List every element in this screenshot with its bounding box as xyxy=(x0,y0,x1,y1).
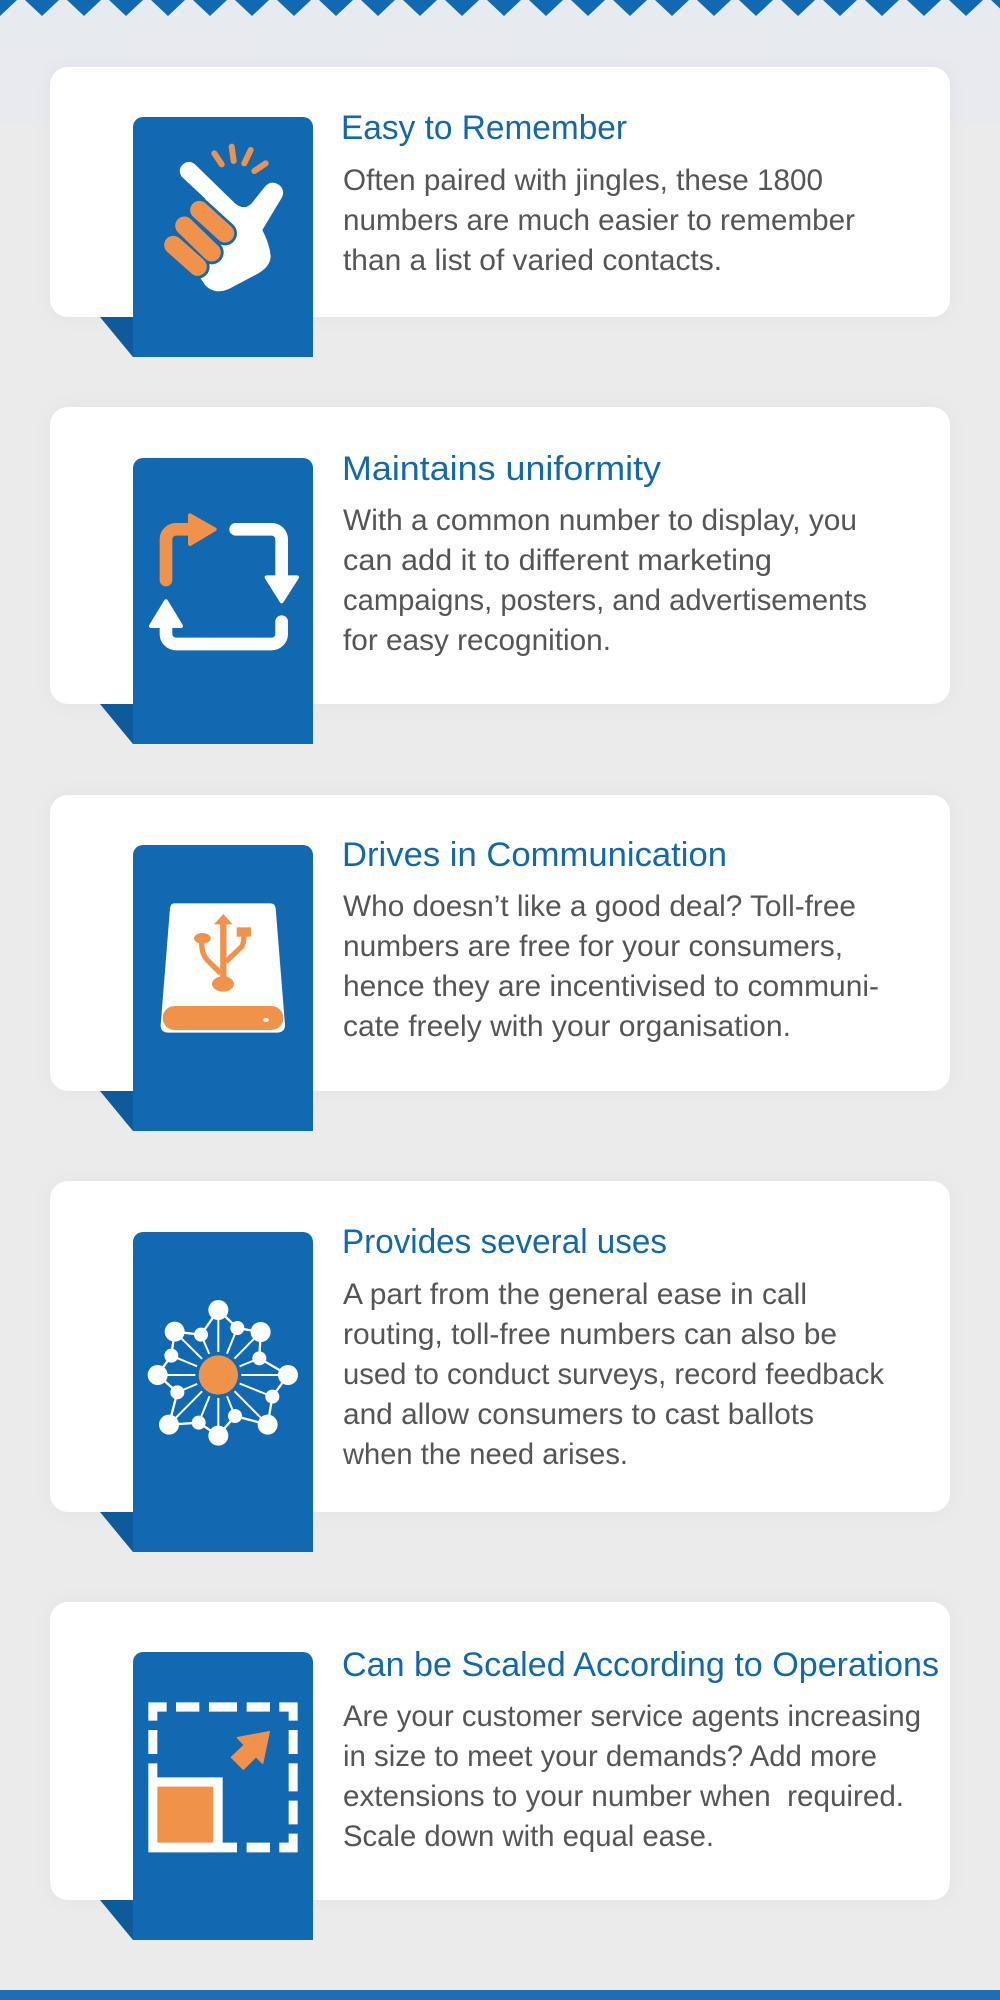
icon: network hub xyxy=(148,1300,298,1446)
blue tab xyxy=(133,458,313,744)
icon: scale up square xyxy=(148,1702,298,1852)
body text: routing, toll-free numbers can also be xyxy=(343,1318,837,1351)
ribbon fold xyxy=(100,317,133,357)
icon: usb drive xyxy=(161,903,285,1033)
top zigzag border xyxy=(0,0,1000,16)
icon: cycle arrows xyxy=(151,515,297,644)
blue tab xyxy=(133,845,313,1131)
body text: Who doesn’t like a good deal? Toll-free xyxy=(343,890,856,923)
body text: campaigns, posters, and advertisements xyxy=(343,584,867,617)
card background xyxy=(50,407,950,704)
panel: provides several uses xyxy=(50,1181,950,1552)
body text: numbers are much easier to remember xyxy=(343,204,855,237)
card background xyxy=(50,795,950,1091)
heading: Provides several uses xyxy=(342,1223,667,1261)
body text: A part from the general ease in call xyxy=(343,1278,807,1311)
heading: Drives in Communication xyxy=(342,836,727,874)
body text xyxy=(342,1278,885,1471)
heading: Maintains uniformity xyxy=(342,450,661,488)
heading: Easy to Remember xyxy=(341,109,627,147)
body text xyxy=(343,504,867,657)
ribbon fold xyxy=(100,1091,133,1131)
card background xyxy=(50,1181,950,1512)
blue tab xyxy=(133,1652,313,1940)
body text xyxy=(343,890,879,1043)
body text: hence they are incentivised to communi- xyxy=(343,970,879,1003)
body text: for easy recognition. xyxy=(343,624,611,657)
body text: cate freely with your organisation. xyxy=(343,1010,791,1043)
body text: With a common number to display, you xyxy=(343,504,857,537)
ribbon fold xyxy=(100,1512,133,1552)
body text: can add it to different marketing xyxy=(343,544,772,577)
blue tab xyxy=(133,117,313,357)
panel: easy to remember xyxy=(50,67,950,357)
body text: used to conduct surveys, record feedback xyxy=(343,1358,885,1391)
card background xyxy=(50,67,950,317)
body text: Scale down with equal ease. xyxy=(343,1820,714,1853)
body text xyxy=(343,1700,921,1853)
panel: can be scaled xyxy=(50,1602,950,1940)
body text: when the need arises. xyxy=(342,1438,628,1471)
body text: numbers are free for your consumers, xyxy=(343,930,843,963)
blue tab xyxy=(133,1232,313,1552)
panel: drives in communication xyxy=(50,795,950,1131)
body text: in size to meet your demands? Add more xyxy=(343,1740,877,1773)
panel: maintains uniformity xyxy=(50,407,950,744)
body text: Are your customer service agents increasing xyxy=(343,1700,921,1733)
body text: Often paired with jingles, these 1800 xyxy=(343,164,823,197)
body text: extensions to your number when required. xyxy=(343,1780,904,1813)
body text: than a list of varied contacts. xyxy=(343,244,722,277)
ribbon fold xyxy=(100,704,133,744)
ribbon fold xyxy=(100,1900,133,1940)
heading: Can be Scaled According to Operations xyxy=(342,1646,939,1684)
icon: finger snap xyxy=(173,147,283,291)
bottom bar xyxy=(0,1990,1000,2000)
body text: and allow consumers to cast ballots xyxy=(343,1398,814,1431)
body text xyxy=(343,164,855,277)
card background xyxy=(50,1602,950,1900)
